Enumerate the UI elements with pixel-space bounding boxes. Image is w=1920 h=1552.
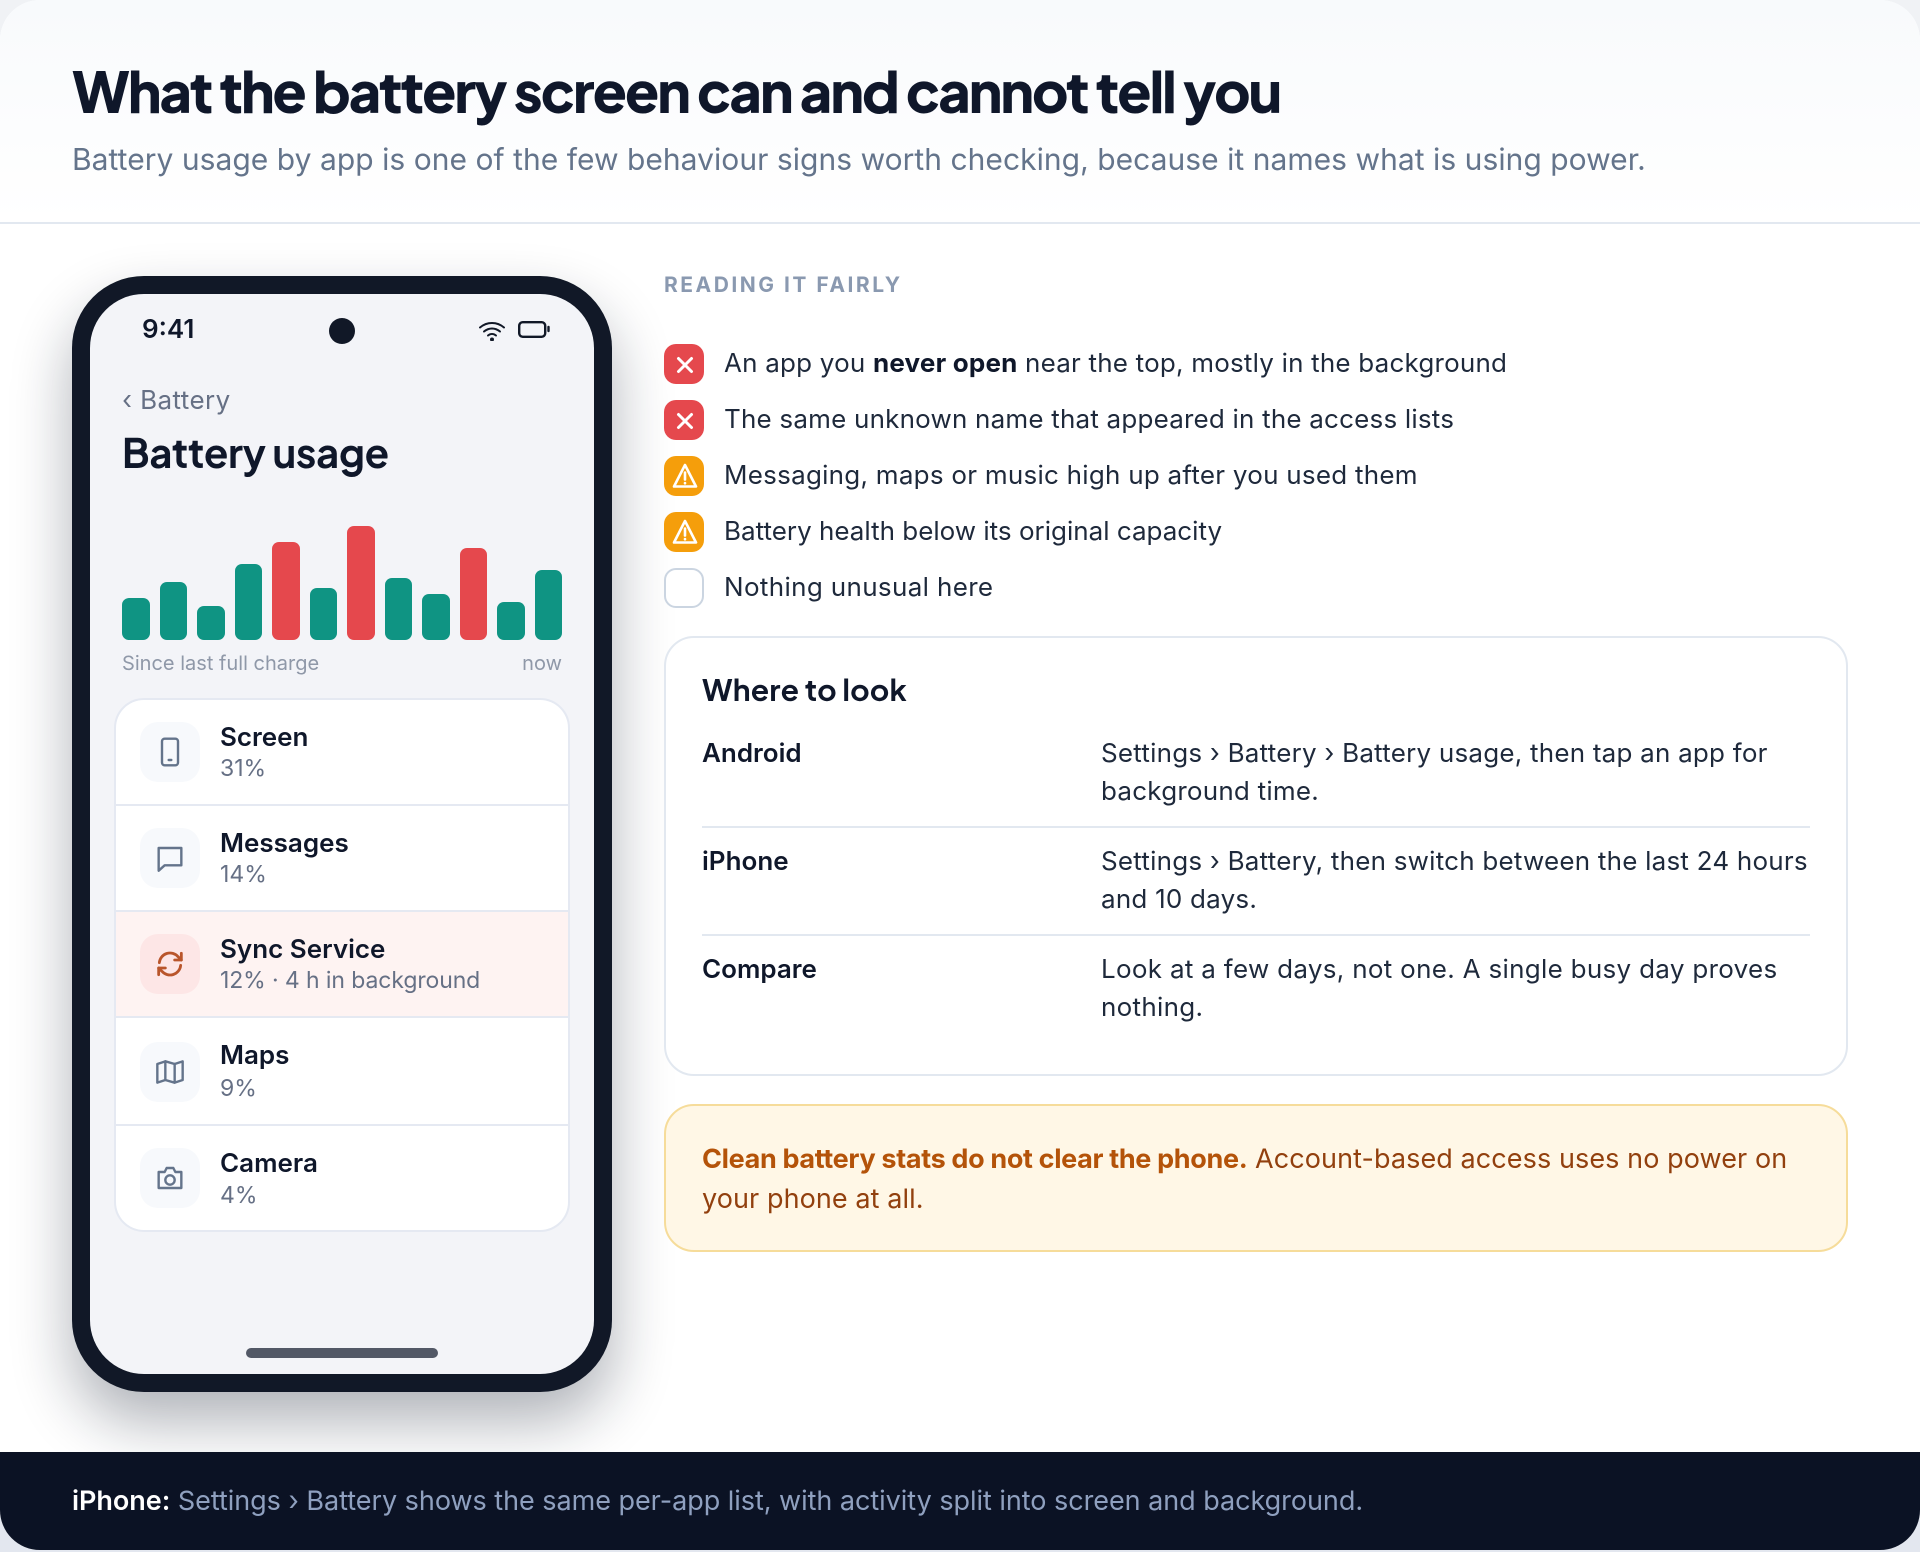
camera dot [329, 318, 355, 344]
row: iphone label: iPhone [702, 846, 789, 877]
item text: Messaging, maps or music high up after you used them [724, 460, 1418, 491]
row: android label: Android [702, 738, 802, 769]
app name: Maps [220, 1040, 289, 1071]
row: compare label: Compare [702, 954, 817, 985]
row: compare text: nothing. [1101, 992, 1203, 1023]
icon: battery [518, 321, 550, 338]
app percent: 14% [220, 860, 267, 888]
subtitle: Battery usage by app is one of the few behaviour signs worth checking, because it names what is using power. [72, 142, 1646, 178]
callout text [702, 1142, 1787, 1215]
icon: red cross [664, 400, 704, 440]
title: What the battery screen can and cannot tell you [72, 56, 1280, 126]
icon: sync [140, 934, 200, 994]
checklist [664, 344, 1507, 608]
row: android text [1101, 738, 1768, 807]
icon: empty box [664, 568, 704, 608]
item text: An app you never open near the top, mostly in the background [724, 348, 1507, 379]
callout text: your phone at all. [702, 1182, 924, 1215]
phone mockup [72, 276, 612, 1392]
panel heading: Where to look [702, 670, 907, 708]
icon: amber warning [664, 456, 704, 496]
app percent: 4% [220, 1181, 257, 1209]
icon: phone [140, 722, 200, 782]
item text: Battery health below its original capacity [724, 516, 1222, 547]
section label: READING IT FAIRLY [664, 273, 903, 298]
footer text: iPhone: Settings › Battery shows the same per-app list, with activity split into screen and background. [72, 1484, 1363, 1517]
app name: Sync Service [220, 934, 385, 965]
status time: 9:41 [142, 314, 194, 345]
item text: The same unknown name that appeared in the access lists [724, 404, 1454, 435]
row: iphone text: Settings › Battery, then switch between the last 24 hours [1101, 846, 1808, 877]
item text: Nothing unusual here [724, 572, 993, 603]
callout text: Clean battery stats do not clear the phone. Account-based access uses no power on [702, 1142, 1787, 1175]
home indicator [246, 1348, 438, 1358]
icon: wifi [479, 322, 505, 341]
row: android text: background time. [1101, 776, 1319, 807]
row: android text: Settings › Battery › Battery usage, then tap an app for [1101, 738, 1768, 769]
app name: Camera [220, 1148, 318, 1179]
app percent: 31% [220, 754, 266, 782]
chart label: now: now [522, 651, 562, 675]
row: compare text [1101, 954, 1778, 1023]
app name: Messages [220, 828, 349, 859]
back link: ‹ Battery [122, 385, 231, 416]
row: compare text: Look at a few days, not one. A single busy day proves [1101, 954, 1778, 985]
app name: Screen [220, 722, 308, 753]
icon: message [140, 828, 200, 888]
icon: map [140, 1042, 200, 1102]
row: iphone text [1101, 846, 1808, 915]
callout [664, 1104, 1848, 1252]
row: sync service highlighted [116, 912, 568, 1018]
chart label: since last full charge: Since last full charge [122, 651, 319, 675]
icon: camera [140, 1148, 200, 1208]
app usage list [114, 698, 570, 1232]
phone screen [90, 294, 594, 1374]
row: messages [116, 806, 568, 912]
icon: amber warning [664, 512, 704, 552]
row: iphone text: and 10 days. [1101, 884, 1257, 915]
row: screen [116, 700, 568, 806]
panel: where to look [664, 636, 1848, 1076]
row: camera [116, 1126, 568, 1232]
bar chart [122, 526, 562, 640]
screen heading: Battery usage [122, 426, 389, 477]
row: maps [116, 1018, 568, 1126]
icon: red cross [664, 344, 704, 384]
header band [0, 0, 1920, 224]
app percent: 12% · 4 h in background [220, 966, 480, 994]
app percent: 9% [220, 1074, 257, 1102]
footer bar [0, 1452, 1920, 1550]
